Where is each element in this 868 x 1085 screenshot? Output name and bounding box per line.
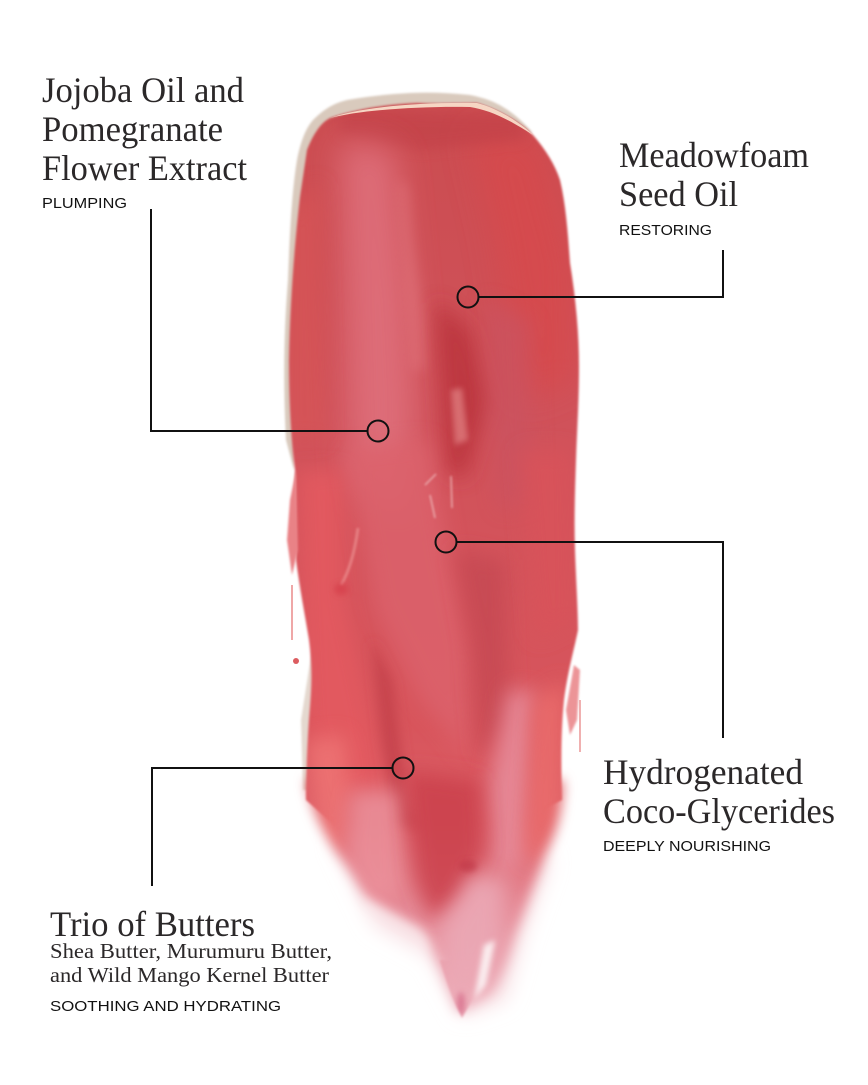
mid salmon band: [358, 452, 466, 736]
heading: Meadowfoam: [619, 135, 809, 175]
marker: [368, 420, 388, 442]
blush patch: [439, 866, 510, 962]
left edge warm band: [285, 180, 325, 440]
callout: trio of butters: [50, 758, 414, 1015]
marker area right band: [496, 319, 526, 393]
central crimson fold: [435, 300, 490, 480]
swatch beige edge: [284, 93, 533, 470]
top dark band: [348, 120, 512, 140]
gloss ticks: [425, 474, 452, 518]
leader line: [152, 768, 393, 886]
swatch lower left beige edge: [301, 650, 320, 790]
right drip: [579, 700, 581, 752]
swatch soft halo: [335, 820, 550, 1015]
leader line: [456, 542, 723, 738]
white wedge: [474, 940, 495, 1000]
pale lower left: [360, 892, 430, 946]
sub text: Shea Butter, Murumuru Butter,: [50, 939, 332, 963]
marker: [392, 758, 414, 778]
heading: Hydrogenated: [603, 752, 803, 792]
callout: jojoba oil: [42, 70, 388, 442]
lower pink band: [345, 790, 405, 915]
left drip: [291, 585, 293, 640]
top rim highlight: [330, 103, 533, 135]
upper mid rose band: [520, 450, 575, 640]
label: DEEPLY NOURISHING: [603, 838, 771, 855]
callout: jojoba oil: Flower Extract: [42, 148, 247, 188]
lower crimson: [405, 770, 485, 920]
marker: [458, 286, 478, 308]
leader line: [151, 209, 368, 431]
label: RESTORING: [619, 222, 712, 239]
swatch body: [288, 102, 581, 1019]
smear dot: [334, 583, 348, 595]
mid left bright band: [299, 470, 370, 776]
callout: meadowfoam: [458, 135, 809, 308]
gloss streak 1: [404, 192, 424, 366]
left splatter: [287, 470, 298, 575]
mid crimson band: [462, 559, 506, 742]
right pale band: [488, 690, 535, 880]
callout: coco-glycerides: Coco-Glycerides: [603, 791, 835, 831]
callout: trio of butters: and Wild Mango Kernel Butter: [50, 963, 329, 987]
marker: [436, 532, 456, 552]
gloss streak 2: [451, 388, 468, 445]
lip product swatch: [283, 92, 582, 1020]
upper left light band: [340, 140, 415, 520]
right splatter: [566, 665, 580, 735]
heading: Jojoba Oil and: [42, 70, 244, 110]
label: SOOTHING AND HYDRATING: [50, 998, 281, 1015]
smear curve: [341, 528, 358, 585]
heading: Trio of Butters: [50, 904, 255, 944]
callout: jojoba oil: Pomegranate: [42, 109, 223, 149]
dark drop: [459, 860, 477, 872]
dark seam: [374, 660, 412, 826]
leader line: [478, 250, 723, 297]
label: PLUMPING: [42, 195, 127, 212]
far right coral band: [525, 680, 565, 860]
lower left salmon: [308, 734, 352, 840]
callout: coco-glycerides: [436, 532, 835, 855]
right shoulder red: [500, 155, 565, 381]
tip accent: [457, 992, 465, 1016]
callout: meadowfoam: Seed Oil: [619, 174, 738, 214]
droplet: [293, 658, 299, 664]
